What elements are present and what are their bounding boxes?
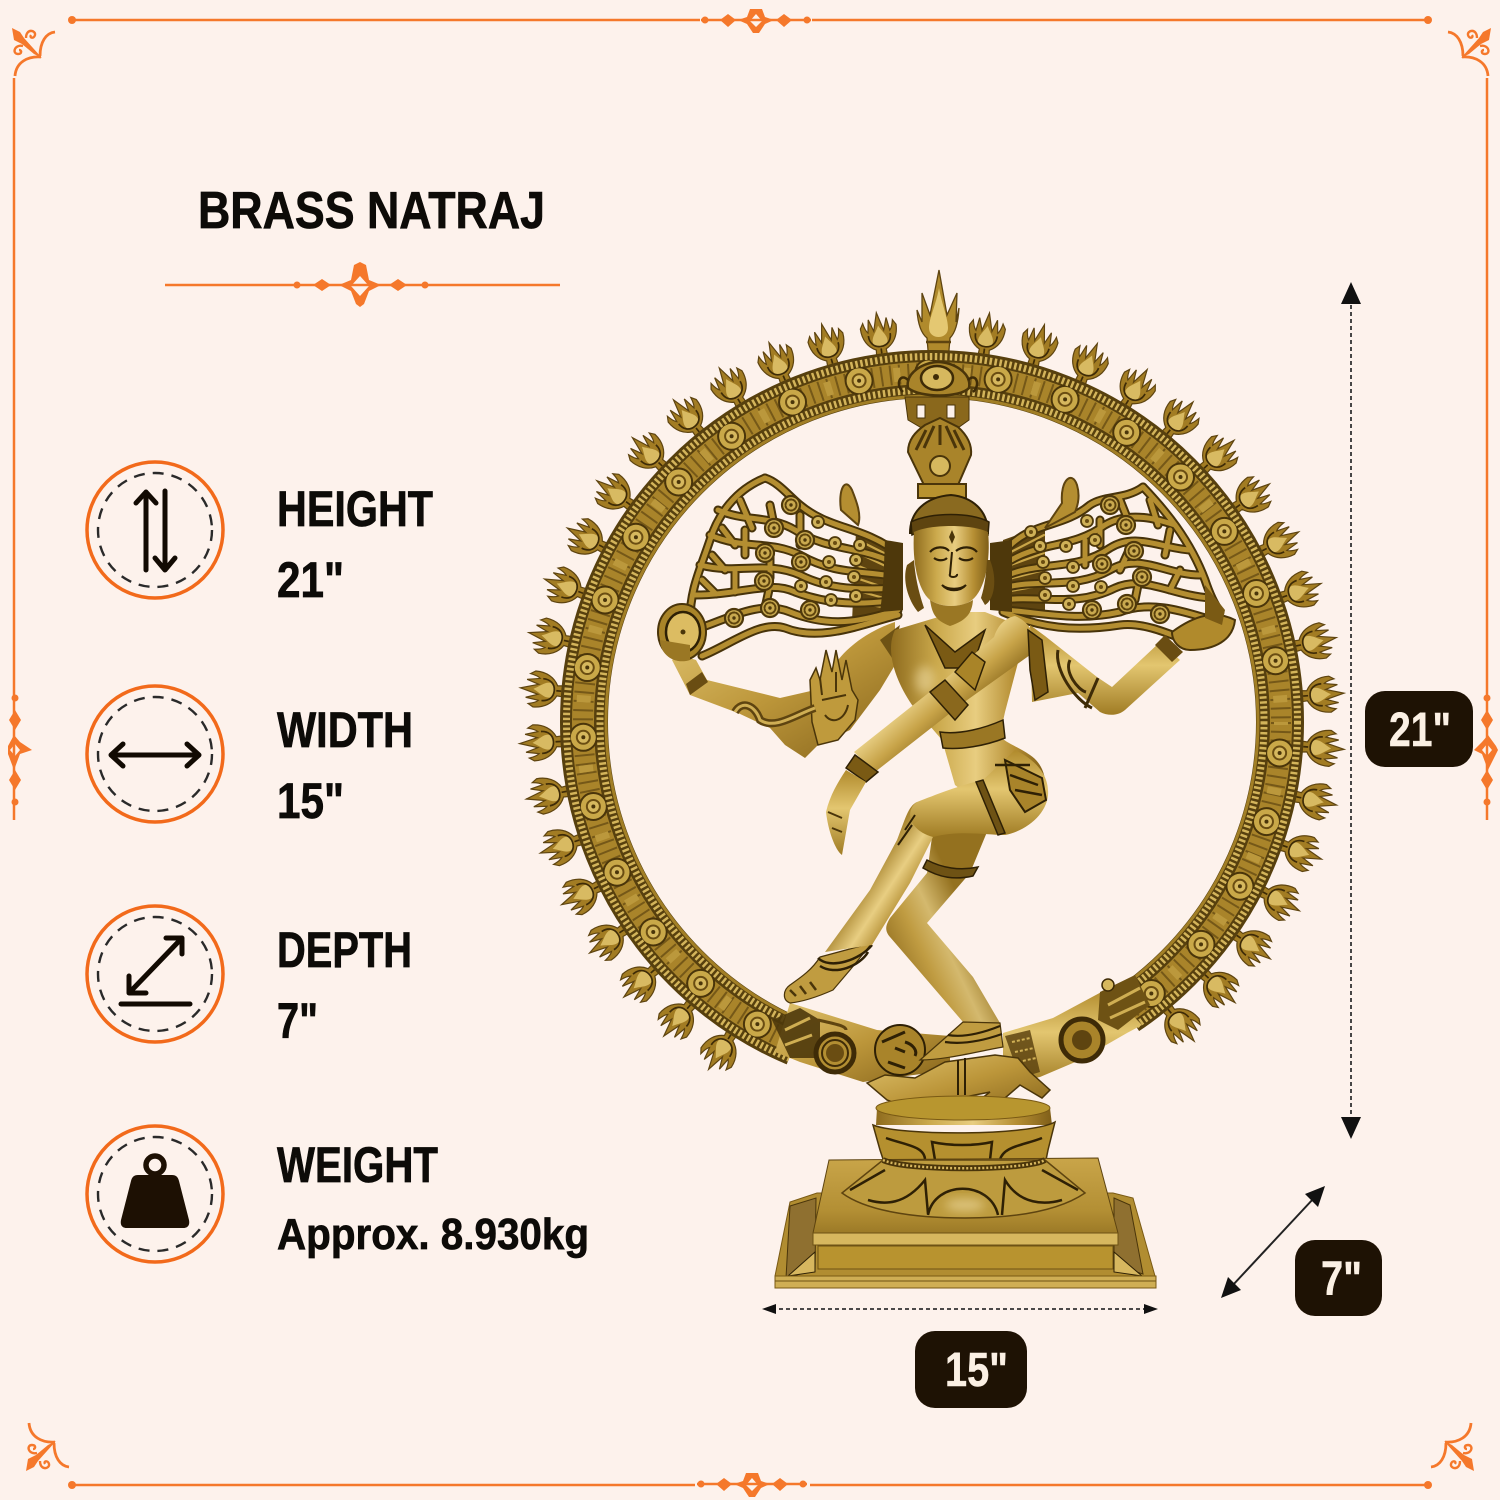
label: height: HEIGHT: [277, 481, 433, 537]
ring of fire: [566, 356, 1298, 1088]
icon: width: [87, 686, 223, 822]
back arm with drum: [658, 604, 900, 758]
badge: height value: 21": [1389, 704, 1451, 757]
height dimension arrow: [1341, 282, 1361, 1139]
flames around ring: [519, 270, 1345, 1079]
right hair fan: [1003, 478, 1220, 638]
label: height: 21": [277, 552, 344, 608]
label: depth: [277, 922, 412, 1049]
badge: depth value: [1295, 1240, 1382, 1316]
raised thigh and shin: [825, 750, 1048, 952]
left hair fan: [690, 478, 899, 656]
badge: width value: [915, 1331, 1027, 1408]
label: width: WIDTH: [277, 702, 413, 758]
feet: [784, 943, 1003, 1060]
dwarf Apasmara: [867, 1025, 1050, 1112]
label: weight: WEIGHT: [277, 1137, 438, 1193]
label: weight: [277, 1137, 589, 1259]
head and face: [880, 495, 1012, 626]
label: width: [277, 702, 413, 829]
square base: [775, 1158, 1156, 1288]
badge: depth value: 7": [1321, 1253, 1362, 1306]
badge: width value: 15": [945, 1344, 1008, 1397]
label: width: 15": [277, 773, 344, 829]
front diagonal arm: [826, 616, 1048, 855]
icon: height: [87, 462, 223, 598]
abhaya hand with snake: [735, 650, 858, 745]
label: height: [277, 481, 433, 608]
width dimension arrow: [762, 1304, 1158, 1314]
icon: weight: [87, 1126, 223, 1262]
label: depth: DEPTH: [277, 922, 412, 978]
right back arm: [1030, 585, 1235, 715]
statue: Brass Natraj: [519, 270, 1345, 1288]
title divider: [165, 262, 560, 307]
label: weight: Approx. 8.930kg: [277, 1210, 589, 1259]
icon: depth: [87, 906, 223, 1042]
lotus pedestal: [873, 1096, 1055, 1165]
standing leg: [886, 830, 1000, 1023]
depth dimension arrow: [1221, 1186, 1325, 1298]
label: depth: 7": [277, 993, 318, 1049]
crown ornament above head: [905, 397, 971, 498]
lower ring horns: [772, 975, 1150, 1085]
ring top boss: [899, 362, 977, 396]
title: BRASS NATRAJ: [198, 182, 545, 240]
badge: height value: [1365, 691, 1473, 767]
torso and hip: [891, 612, 1045, 820]
